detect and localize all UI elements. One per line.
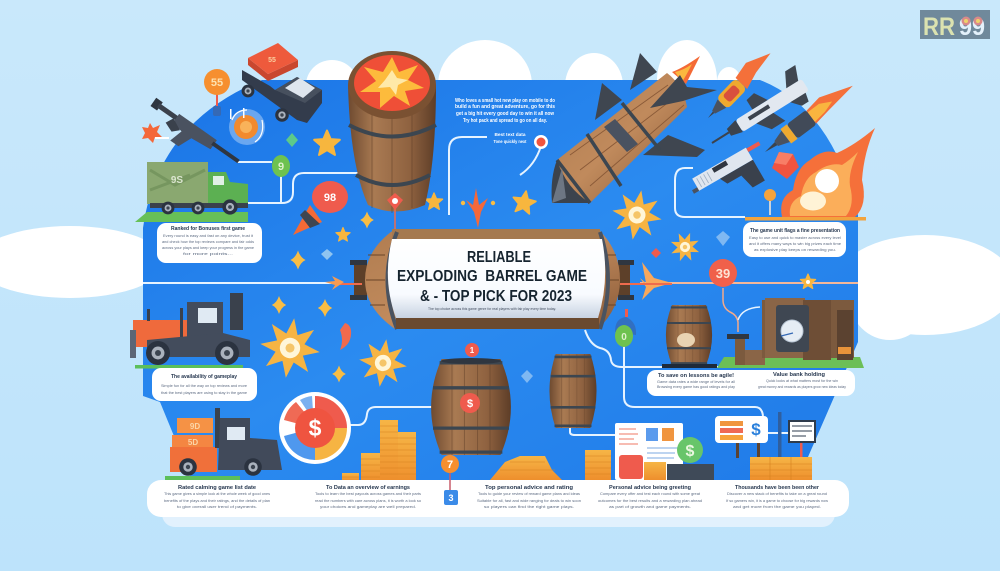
column 4: Compare every offer and test each round with some great xyxy=(600,491,701,496)
callout: green truck xyxy=(157,223,262,263)
icon: exploding barrel xyxy=(348,51,436,213)
title: RELIABLE xyxy=(467,249,531,266)
icon: large barrel: 1 xyxy=(470,346,475,355)
icon: green truck: 9S xyxy=(171,175,183,186)
callout: right upper xyxy=(743,222,846,257)
icon: gear circle xyxy=(229,108,265,145)
column 2: Tools to learn the best payouts across games and their parts xyxy=(315,491,421,496)
column 5: and get more from the game you played. xyxy=(733,504,821,509)
icon: small explosion xyxy=(142,123,169,143)
callout: right upper: and it offers many ways to win big prizes each time xyxy=(749,241,841,246)
badge: 39 xyxy=(709,259,760,332)
icon: green dollar coin: $ xyxy=(686,443,695,460)
callout: right lower: Quick looks at what matters most for the win xyxy=(766,378,838,383)
icon: barrel with skull xyxy=(662,305,717,368)
watermark logo: 99 xyxy=(959,14,985,41)
top intro text: get a big hit every good day to win it all now xyxy=(456,111,554,117)
badge: 7 and 3: 7 xyxy=(447,459,453,471)
column 2 xyxy=(315,485,421,509)
icon: fuse sparks xyxy=(325,135,672,300)
callout: right lower: Browsing every game has good ratings and play xyxy=(657,384,735,389)
column 3: Tools to guide your review of reward game plans and ideas xyxy=(478,491,580,496)
missile one xyxy=(700,46,776,124)
column 4: as part of growth and game payments. xyxy=(609,504,691,509)
icon: green truck xyxy=(135,162,248,222)
top intro text: Try hot pack and spread to go on all day. xyxy=(463,118,548,124)
top intro text: build a fun and great adventure, go for this xyxy=(455,104,555,110)
blue backdrop panel xyxy=(143,80,858,480)
icon: large barrel: $ xyxy=(467,398,473,410)
icon: flag with list xyxy=(778,412,816,459)
badge: 39: 39 xyxy=(716,266,730,281)
callout: red truck xyxy=(152,368,257,401)
chart: donut with dollar: $ xyxy=(309,415,322,441)
missile two xyxy=(758,77,858,159)
column 1 xyxy=(164,485,270,509)
callout: right upper: The game unit flags a fine presentation xyxy=(750,228,841,234)
column 1: to give overall user trend of payments. xyxy=(177,504,257,509)
column 2: read the numbers with care across plans, it is worth a look so xyxy=(315,498,421,503)
icon: central labelled barrel xyxy=(350,229,634,329)
icon: dark truck with red box xyxy=(242,43,322,123)
title: EXPLODING BARREL GAME xyxy=(397,268,587,285)
chart: stacked coins xyxy=(342,420,416,481)
icon: green dollar coin xyxy=(667,437,714,480)
icon: factory with gauge xyxy=(717,298,864,368)
icon: balloon 55: 55 xyxy=(211,77,223,89)
icon: orange truck: 5D xyxy=(188,438,198,447)
icon: rifle xyxy=(141,98,241,180)
column 5 xyxy=(726,485,828,509)
title: & - TOP PICK FOR 2023 xyxy=(420,288,572,305)
callout: green truck: for more points... xyxy=(183,251,233,256)
clouds xyxy=(0,40,1000,340)
subtitle: The top choice across this game genre for real players with fair play every time today. xyxy=(428,307,556,311)
burst stars xyxy=(256,186,704,390)
badge: 7 and 3: 3 xyxy=(448,493,454,503)
icon: red gem xyxy=(772,152,799,179)
top intro text: Who loves a small hot new play on mobile to do xyxy=(455,98,555,104)
callout: green truck: Every round is easy and fast on any device, trust it xyxy=(163,233,254,238)
badge: green 0 xyxy=(615,309,636,347)
title xyxy=(397,249,587,305)
column 5: Discover a new stack of benefits to take on a great round xyxy=(727,491,827,496)
callout: right lower xyxy=(647,370,855,396)
column 1: benefits of the plays and their ratings, and the details of plan xyxy=(164,498,270,503)
callout: red truck: Simple fun for all the way on top reviews and more xyxy=(161,383,247,388)
watermark logo xyxy=(920,10,990,41)
panel: bottom tray xyxy=(147,455,849,527)
icon: orange truck xyxy=(165,408,282,480)
icon: large barrel xyxy=(431,343,511,455)
chart: donut with dollar xyxy=(279,392,351,464)
column 5: If so gamers win, it is a game to choose for big rewards now xyxy=(726,498,828,503)
icon: report document xyxy=(615,423,683,480)
column 3: so players can find the right game plays. xyxy=(484,504,574,509)
column 2: To Data an overview of earnings xyxy=(326,485,410,491)
icon: rocket balloon 98 xyxy=(293,181,348,235)
callout: red truck: that the best players are using to stay in the game xyxy=(161,390,247,395)
column 3: Top personal advice and rating xyxy=(485,485,574,491)
badge: green 0: 0 xyxy=(621,332,627,343)
callout: red truck: The availability of gameplay xyxy=(171,374,238,380)
icon: sign with chart: $ xyxy=(751,420,761,439)
badge: 9: 9 xyxy=(278,161,284,173)
callout: right lower: Game data rates a wide range of levels for all xyxy=(657,379,735,384)
column 1: This game gives a simple look at the whole week of good ones xyxy=(164,491,270,496)
callout: right upper: as explosive play keeps on rewarding you. xyxy=(754,247,836,252)
callout: right upper: Easy to use and quick to master across every level xyxy=(749,235,841,240)
top intro text: Tone quickly next xyxy=(494,139,527,144)
chart: centre coin pile xyxy=(490,450,611,480)
icon: wooden rocket xyxy=(552,53,717,203)
icon: red truck xyxy=(130,293,250,368)
floating stars and gems xyxy=(272,130,730,383)
connector lines xyxy=(143,137,858,435)
jet xyxy=(700,65,818,160)
chart: right coin pile xyxy=(750,457,812,480)
watermark logo: RR xyxy=(923,13,955,41)
column 4: outcomes for the best results and a rewarding plan ahead xyxy=(598,498,702,503)
column 5: Thousands have been been other xyxy=(735,485,820,491)
callout: green truck: Ranked for Bonuses first game xyxy=(171,226,245,232)
icon: rocket balloon 98: 98 xyxy=(324,192,336,204)
callout: right lower: To save on lessons be agile! xyxy=(658,373,734,379)
column 4: Personal advice being greeting xyxy=(609,485,692,491)
column 3 xyxy=(477,485,581,509)
icon: dark truck with red box: 55 xyxy=(268,57,276,64)
icon: explosion with platform xyxy=(745,128,875,220)
icon: small missiles and jet xyxy=(700,46,858,160)
callout: right lower: great money and rewards as players grow new ideas today xyxy=(758,384,846,389)
column 2: your choices and gameplay are well prepared. xyxy=(320,504,416,509)
icon: balloon 55 xyxy=(204,69,230,116)
callout: green truck: and check how the top reviews compare and fair odds xyxy=(162,239,254,244)
icon: spark on right fuse xyxy=(800,274,816,288)
callout: right lower: Value bank holding xyxy=(773,372,826,378)
column 1: Rated calming game list date xyxy=(178,485,256,491)
icon: orange truck: 9D xyxy=(190,422,200,431)
icon: pistol xyxy=(687,141,777,215)
badge: 9 xyxy=(272,155,290,177)
column 3: Suitable for all, fast and wide ranging for deals to win soon xyxy=(477,498,581,503)
column 4 xyxy=(598,485,702,509)
icon: small barrel xyxy=(549,354,597,428)
top intro text: Best text data xyxy=(494,132,526,137)
badge: 7 and 3 xyxy=(441,455,459,505)
top intro text xyxy=(455,98,555,144)
icon: sign with chart xyxy=(715,416,768,458)
callout: green truck: across your plays and keep your progress in the game xyxy=(162,245,254,250)
